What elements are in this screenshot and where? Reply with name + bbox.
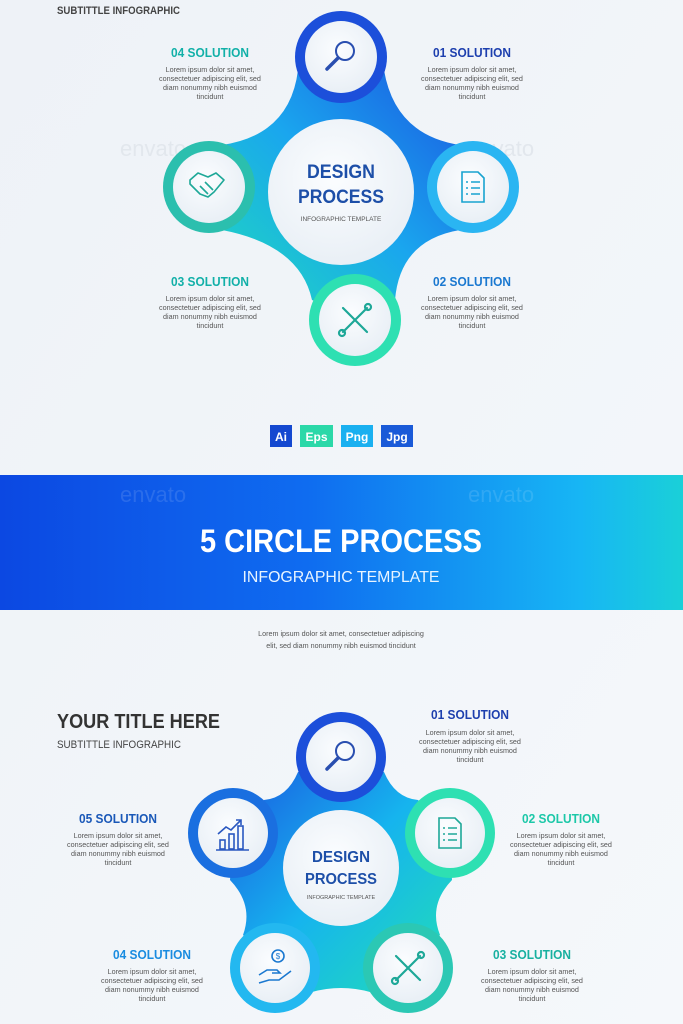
label: 02 solution: diam nonummy nibh euismod: [514, 849, 608, 858]
label: 05 solution: Lorem ipsum dolor sit amet,: [74, 831, 162, 840]
label: 04 solution: diam nonummy nibh euismod: [105, 985, 199, 994]
blob shape: [230, 757, 452, 992]
satellite: left handshake: [163, 141, 255, 233]
label: 01 solution: diam nonummy nibh euismod: [423, 746, 517, 755]
file format badges: [270, 425, 413, 447]
label: 04 solution: 04 SOLUTION: [113, 947, 191, 962]
label: 03 solution: 03 SOLUTION: [171, 274, 249, 289]
banner: envato: [120, 482, 186, 507]
center circle: DESIGN: [307, 162, 375, 183]
center circle: INFOGRAPHIC TEMPLATE: [307, 895, 375, 901]
center circle: [268, 119, 414, 265]
label: 02 solution: consectetuer adipiscing elit, sed: [510, 840, 612, 849]
label: 01 solution: [419, 707, 521, 764]
satellite: bottom-left money: [230, 923, 320, 1013]
watermarks: [120, 136, 534, 161]
label: 01 solution: tincidunt: [457, 755, 483, 764]
label: 03 solution: tincidunt: [519, 994, 545, 1003]
label: 04 solution: consectetuer adipiscing elit, sed: [101, 976, 203, 985]
subtitle top: SUBTITTLE INFOGRAPHIC: [57, 5, 180, 17]
satellite: top magnifier: [296, 712, 386, 802]
label: 05 solution: [67, 811, 169, 867]
center circle: PROCESS: [305, 871, 377, 888]
label: 02 solution: tincidunt: [459, 321, 485, 330]
label: 04 solution: tincidunt: [139, 994, 165, 1003]
satellite: bottom tools: [309, 274, 401, 366]
intro text: [258, 629, 424, 650]
center circle: INFOGRAPHIC TEMPLATE: [301, 216, 382, 223]
satellite: top magnifier: [295, 11, 387, 103]
label: 02 solution: 02 SOLUTION: [522, 811, 600, 826]
label: 03 solution: consectetuer adipiscing elit, sed: [481, 976, 583, 985]
banner: envato: [468, 482, 534, 507]
satellite: right document: [427, 141, 519, 233]
watermarks: envato: [468, 136, 534, 161]
label: 05 solution: 05 SOLUTION: [79, 811, 157, 826]
label: 04 solution: Lorem ipsum dolor sit amet,: [108, 967, 196, 976]
label: 04 solution: consectetuer adipiscing elit, sed: [159, 74, 261, 83]
label: 03 solution: [481, 947, 583, 1003]
label: 02 solution: [421, 274, 523, 330]
label: 03 solution: Lorem ipsum dolor sit amet,: [488, 967, 576, 976]
diagram: 4 circle design process: [163, 11, 519, 366]
label: 02 solution: consectetuer adipiscing elit, sed: [421, 303, 523, 312]
label: 03 solution: Lorem ipsum dolor sit amet,: [166, 294, 254, 303]
label: 03 solution: diam nonummy nibh euismod: [163, 312, 257, 321]
banner: [0, 475, 683, 610]
label: 03 solution: 03 SOLUTION: [493, 947, 571, 962]
label: 03 solution: consectetuer adipiscing elit, sed: [159, 303, 261, 312]
label: 04 solution: diam nonummy nibh euismod: [163, 83, 257, 92]
label: 05 solution: diam nonummy nibh euismod: [71, 849, 165, 858]
title bottom: YOUR TITLE HERE: [57, 711, 220, 733]
label: 04 solution: [101, 947, 203, 1003]
intro text: elit, sed diam nonummy nibh euismod tincidunt: [266, 641, 416, 650]
center circle: [283, 810, 399, 926]
file format badges: Jpg: [386, 430, 408, 444]
label: 02 solution: diam nonummy nibh euismod: [425, 312, 519, 321]
label: 05 solution: tincidunt: [105, 858, 131, 867]
file format badges: Png: [346, 430, 368, 444]
label: 01 solution: Lorem ipsum dolor sit amet,: [428, 65, 516, 74]
label: 01 solution: tincidunt: [459, 92, 485, 101]
satellite: left chart: [188, 788, 278, 878]
label: 04 solution: Lorem ipsum dolor sit amet,: [166, 65, 254, 74]
label: 02 solution: 02 SOLUTION: [433, 274, 511, 289]
label: 04 solution: 04 SOLUTION: [171, 45, 249, 60]
label: 02 solution: tincidunt: [548, 858, 574, 867]
file format badges: Eps: [305, 430, 328, 444]
title bottom: [57, 711, 220, 751]
label: 03 solution: [159, 274, 261, 330]
intro text: Lorem ipsum dolor sit amet, consectetuer adipiscing: [258, 629, 424, 638]
label: 04 solution: tincidunt: [197, 92, 223, 101]
label: 05 solution: consectetuer adipiscing elit, sed: [67, 840, 169, 849]
diagram: 5 circle design process: [188, 712, 495, 1013]
satellite: bottom-right tools: [363, 923, 453, 1013]
banner: INFOGRAPHIC TEMPLATE: [242, 569, 440, 586]
label: 03 solution: tincidunt: [197, 321, 223, 330]
label: 04 solution: [159, 45, 261, 101]
satellite: right document: [405, 788, 495, 878]
label: 02 solution: [510, 811, 612, 867]
label: 01 solution: consectetuer adipiscing elit, sed: [421, 74, 523, 83]
title bottom: SUBTITTLE INFOGRAPHIC: [57, 739, 181, 751]
label: 01 solution: 01 SOLUTION: [433, 45, 511, 60]
label: 01 solution: [421, 45, 523, 101]
blob shape: [209, 57, 473, 320]
label: 01 solution: diam nonummy nibh euismod: [425, 83, 519, 92]
label: 03 solution: diam nonummy nibh euismod: [485, 985, 579, 994]
label: 02 solution: Lorem ipsum dolor sit amet,: [428, 294, 516, 303]
center circle: DESIGN: [312, 849, 370, 866]
watermarks: envato: [120, 136, 186, 161]
label: 02 solution: Lorem ipsum dolor sit amet,: [517, 831, 605, 840]
satellite: bottom-left money: $: [276, 952, 281, 961]
label: 01 solution: 01 SOLUTION: [431, 707, 509, 722]
label: 01 solution: consectetuer adipiscing elit, sed: [419, 737, 521, 746]
center circle: PROCESS: [298, 187, 384, 208]
file format badges: Ai: [275, 430, 287, 444]
banner: 5 CIRCLE PROCESS: [200, 523, 482, 559]
label: 01 solution: Lorem ipsum dolor sit amet,: [426, 728, 514, 737]
